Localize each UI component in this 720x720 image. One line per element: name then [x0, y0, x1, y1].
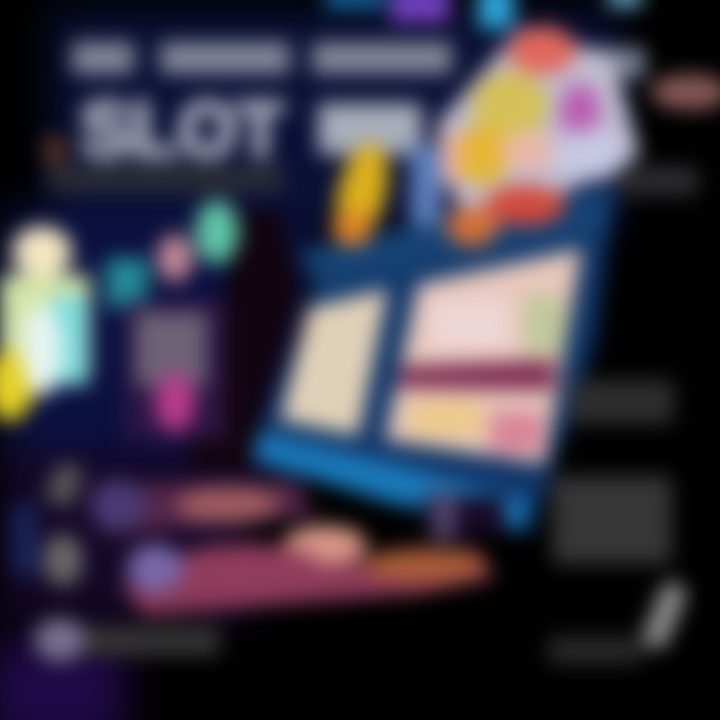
- icon: coin decoration: [43, 134, 67, 166]
- right screen: [385, 248, 582, 464]
- yellow reel symbol: [327, 138, 397, 246]
- right peach accent: [650, 74, 720, 110]
- colourful jackpot sign: [433, 26, 640, 246]
- blue panel: [410, 145, 442, 225]
- subtitle: [48, 166, 284, 192]
- left slot machine: [0, 226, 148, 421]
- desk: [90, 479, 495, 615]
- icon: white slash: [639, 578, 690, 653]
- title: SLOT: [80, 85, 284, 173]
- left screen: [280, 288, 388, 436]
- person silhouette: [186, 210, 298, 475]
- middle slot machine: [125, 200, 239, 440]
- slot machine body: [246, 185, 615, 535]
- left column text: [14, 461, 220, 662]
- right column text: [548, 166, 698, 664]
- title: [72, 42, 645, 173]
- top decorative lights: [325, 0, 642, 29]
